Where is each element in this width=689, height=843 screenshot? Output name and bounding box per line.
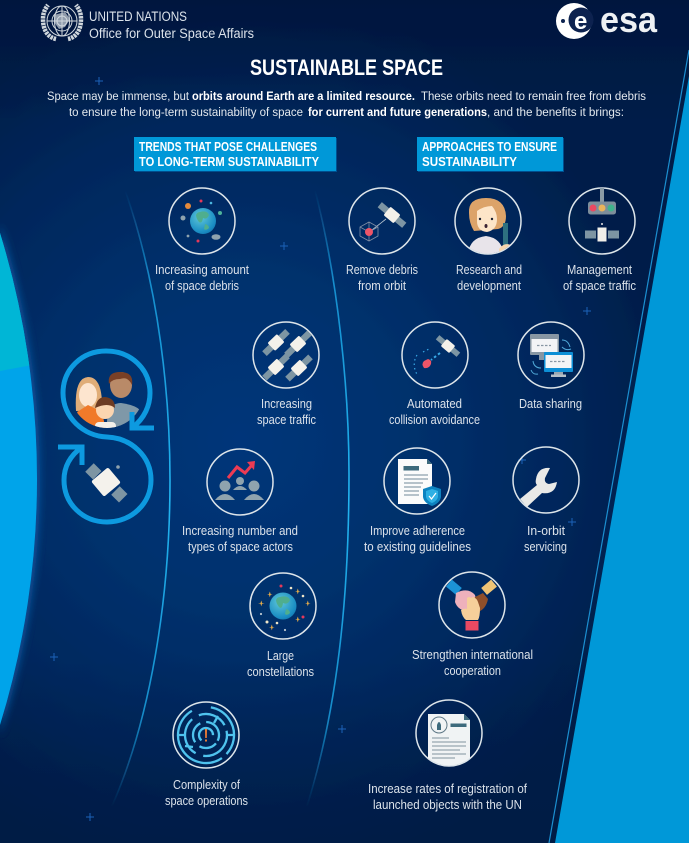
label: constellations xyxy=(247,665,314,679)
item: increase rates of registration xyxy=(368,700,527,812)
label: Automated xyxy=(407,397,462,411)
icon: earth and debris xyxy=(169,188,235,254)
label xyxy=(389,397,480,427)
label xyxy=(563,263,636,293)
heading: trends: TO LONG-TERM SUSTAINABILITY xyxy=(139,155,320,169)
label xyxy=(524,524,567,554)
icon: maze xyxy=(173,702,239,768)
label xyxy=(346,263,418,293)
ESA wordmark: esa xyxy=(600,0,658,40)
intro text xyxy=(47,89,646,119)
label: Strengthen international xyxy=(412,648,533,662)
orbit lines xyxy=(112,190,349,806)
label: Management xyxy=(567,263,632,277)
item: in-orbit servicing xyxy=(513,447,579,554)
label: types of space actors xyxy=(188,540,293,554)
label: cooperation xyxy=(444,664,501,678)
item: remove debris from orbit xyxy=(346,188,418,293)
icon: avoidance manoeuvre xyxy=(402,322,468,388)
heading: trends: TRENDS THAT POSE CHALLENGES xyxy=(139,140,317,154)
UN office name: Office for Outer Space Affairs xyxy=(89,26,254,41)
icon: registration document xyxy=(416,700,482,767)
S-shaped arrow xyxy=(58,351,154,522)
logo: United Nations xyxy=(43,5,254,41)
stars xyxy=(50,77,591,821)
icon: satellite capturing debris xyxy=(349,188,415,254)
item: data sharing xyxy=(518,322,584,411)
label: Research and xyxy=(456,263,522,277)
item: automated collision avoidance xyxy=(389,322,480,427)
item: increasing space traffic xyxy=(253,322,319,427)
item: management of space traffic xyxy=(563,188,636,293)
intro text: , and the benefits it brings: xyxy=(487,105,624,119)
label: Increasing amount xyxy=(155,263,249,277)
satellite xyxy=(85,463,127,502)
item: increasing number and types of space actors xyxy=(182,449,298,554)
label: from orbit xyxy=(358,279,406,293)
label xyxy=(182,524,298,554)
label: of space traffic xyxy=(563,279,636,293)
item: improve adherence to existing guidelines xyxy=(364,448,471,554)
intro text: orbits around Earth are a limited resource. xyxy=(192,89,415,103)
label xyxy=(247,649,314,679)
intro text: for current and future generations xyxy=(308,105,487,119)
icon: joined hands xyxy=(439,572,505,638)
label: Large xyxy=(267,649,294,663)
label: collision avoidance xyxy=(389,413,480,427)
label: servicing xyxy=(524,540,567,554)
icon: UN emblem xyxy=(43,5,81,39)
label: Data sharing xyxy=(519,397,582,411)
heading: approaches: SUSTAINABILITY xyxy=(422,155,518,169)
heading: approaches xyxy=(417,137,564,172)
item: complexity of space operations xyxy=(165,702,248,808)
UN name: UNITED NATIONS xyxy=(89,9,187,24)
label: space operations xyxy=(165,794,248,808)
icon: researcher xyxy=(455,188,521,255)
icon: actors with rising arrow xyxy=(207,449,273,515)
icon: two monitors xyxy=(518,322,584,388)
label xyxy=(368,782,527,812)
icon: ESA crescent: e xyxy=(574,8,587,35)
title: SUSTAINABLE SPACE xyxy=(250,55,443,80)
item: large constellations xyxy=(247,573,316,679)
left planet edge xyxy=(0,223,40,735)
label: Complexity of xyxy=(173,778,240,792)
intro text: Space may be immense, but xyxy=(47,89,190,103)
label xyxy=(412,648,533,678)
label: to existing guidelines xyxy=(364,540,471,554)
label: Increase rates of registration of xyxy=(368,782,527,796)
label: Remove debris xyxy=(346,263,418,277)
icon: wrench xyxy=(513,447,579,513)
label xyxy=(165,778,248,808)
icon: people and satellite cycle xyxy=(58,351,154,522)
label: In-orbit xyxy=(527,524,565,538)
icon: four satellites xyxy=(253,322,319,388)
icon: earth with constellation xyxy=(250,573,316,639)
logo: ESA xyxy=(556,0,658,40)
label xyxy=(257,397,316,427)
icon: traffic light and satellite xyxy=(569,188,635,254)
label xyxy=(364,524,471,554)
icon: document with shield xyxy=(384,448,450,514)
heading: trends xyxy=(134,137,337,172)
label: of space debris xyxy=(165,279,239,293)
label xyxy=(456,263,522,293)
item: strengthen international cooperation xyxy=(412,572,533,678)
right planet edge xyxy=(549,50,689,843)
label: Increasing number and xyxy=(182,524,298,538)
label: launched objects with the UN xyxy=(373,798,522,812)
intro text: to ensure the long-term sustainability of space xyxy=(69,105,303,119)
family xyxy=(76,372,140,428)
label: development xyxy=(457,279,521,293)
item: research and development xyxy=(455,188,522,293)
item: increasing amount of space debris xyxy=(155,188,249,293)
label: space traffic xyxy=(257,413,316,427)
intro text: These orbits need to remain free from debris xyxy=(421,89,646,103)
label: Increasing xyxy=(261,397,312,411)
label xyxy=(155,263,249,293)
heading: approaches: APPROACHES TO ENSURE xyxy=(422,140,557,154)
label: Improve adherence xyxy=(370,524,465,538)
